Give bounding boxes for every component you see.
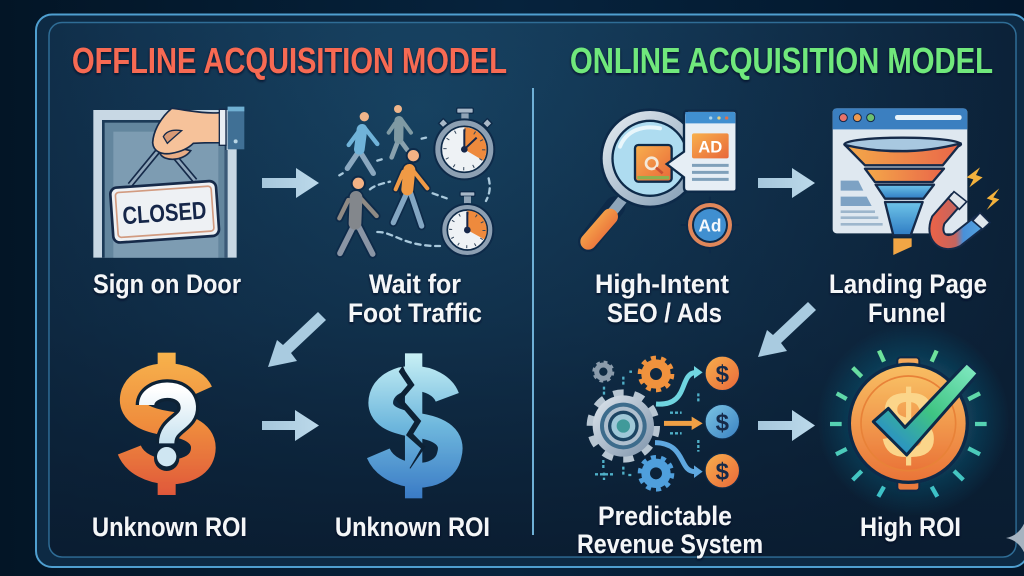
- sign board: closed: [110, 181, 219, 243]
- label: predictable revenue system: Predictable: [598, 501, 732, 531]
- label: wait for foot traffic: [348, 269, 482, 328]
- walker: grey teal: [389, 105, 411, 157]
- stopwatch: bottom: [441, 192, 493, 256]
- revenue coins: $: [716, 458, 729, 485]
- icon: high roi coin with check: $: [881, 372, 935, 479]
- arrow: revenue system to high roi: [758, 410, 815, 441]
- icon: magnifier and ads: [588, 108, 739, 253]
- walker: grey: [339, 177, 377, 254]
- hand holding the sign: [153, 108, 220, 159]
- label: landing page funnel: Funnel: [868, 298, 946, 328]
- revenue coins: [705, 356, 740, 488]
- label: high roi: High ROI: [860, 512, 961, 542]
- gear: orange: [640, 358, 672, 390]
- flow arrows: [655, 366, 703, 478]
- sign board: closed: CLOSED: [122, 197, 207, 230]
- label: unknown roi, left: Unknown ROI: [92, 512, 247, 542]
- icon: high roi coin with check: [817, 323, 1010, 517]
- label: high-intent seo / ads: [595, 269, 729, 328]
- walker: light blue: [347, 112, 377, 173]
- walker: orange: [393, 149, 427, 226]
- label: predictable revenue system: Revenue System: [577, 529, 763, 559]
- label: landing page funnel: Landing Page: [829, 269, 987, 299]
- ad window: AD: [698, 137, 722, 156]
- icon: walkers and stopwatches: [339, 105, 494, 256]
- magnet: [936, 167, 999, 242]
- gear: small grey: [594, 362, 613, 381]
- ad window: [667, 111, 737, 192]
- gear: large silver: [591, 393, 656, 459]
- label: high-intent seo / ads: SEO / Ads: [607, 298, 722, 328]
- label: high-intent seo / ads: High-Intent: [595, 269, 729, 299]
- funnel layers: [844, 138, 961, 255]
- arrow: question dollar to broken dollar: [262, 410, 319, 441]
- heading: offline acquisition model: OFFLINE ACQUISITION MODEL: [72, 40, 507, 81]
- revenue coins: $: [716, 409, 729, 436]
- icon: closed sign on door: [93, 107, 244, 258]
- ad target: [681, 197, 739, 253]
- arrow: foot traffic to unknown roi: [268, 312, 326, 367]
- arrow: seo to funnel: [758, 168, 815, 198]
- sparkle, bottom right: [1006, 519, 1024, 557]
- icon: dollar with question mark: [129, 353, 203, 495]
- center divider: [532, 88, 534, 535]
- arrow: sign to foot traffic: [262, 168, 319, 198]
- label: wait for foot traffic: Foot Traffic: [348, 298, 482, 328]
- revenue coins: $: [716, 361, 729, 388]
- ad target: Ad: [698, 215, 722, 235]
- arrow: funnel to revenue system: [758, 302, 816, 357]
- label: predictable revenue system: [577, 501, 763, 559]
- icon: landing page funnel: [833, 108, 999, 255]
- label: landing page funnel: [829, 269, 987, 328]
- stopwatch: top: [434, 108, 494, 179]
- gear: blue: [640, 457, 672, 489]
- label: wait for foot traffic: Wait for: [369, 269, 461, 299]
- icon: broken dollar: [378, 353, 450, 498]
- label: sign on door: Sign on Door: [93, 269, 241, 299]
- label: unknown roi, right: Unknown ROI: [335, 512, 490, 542]
- icon: gears and revenue flow: [591, 356, 740, 489]
